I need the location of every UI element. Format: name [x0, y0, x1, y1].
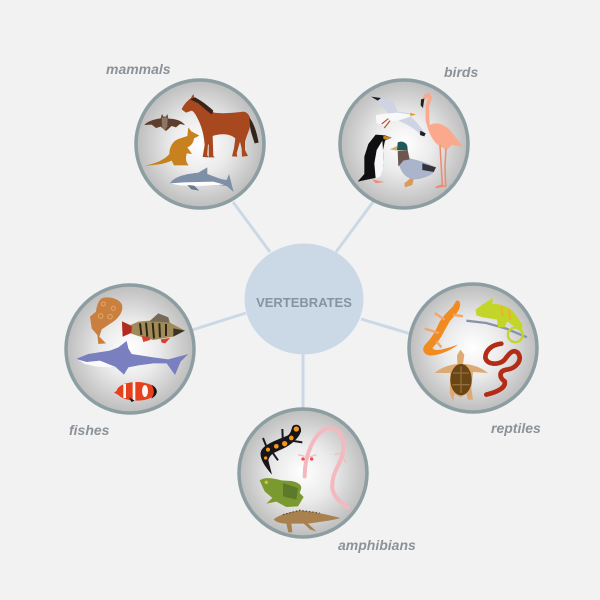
- icon: penguin: [358, 135, 392, 183]
- label: reptiles: reptiles: [491, 420, 541, 436]
- icon: turtle: [435, 350, 488, 401]
- icon: clownfish: [114, 382, 157, 402]
- label: fishes: fishes: [69, 422, 110, 438]
- icon: lizard: [423, 301, 463, 355]
- icon: snake: [485, 344, 520, 395]
- icon: seagull: [371, 97, 426, 136]
- icon: shark: [77, 341, 188, 375]
- icon: caecilian: [298, 428, 348, 508]
- central node: vertebrates: VERTEBRATES: [256, 295, 352, 310]
- panel: reptiles: [409, 284, 537, 412]
- icon: duck: [390, 142, 436, 187]
- icon: frog: [260, 478, 304, 507]
- central node: vertebrates: [244, 244, 364, 354]
- connector lines: [192, 202, 411, 410]
- icon: fire salamander: [261, 425, 302, 475]
- panel: mammals: [136, 80, 264, 208]
- icon: perch: [122, 313, 185, 343]
- icon: dolphin: [170, 167, 234, 192]
- panel: fishes: [66, 285, 194, 413]
- label: amphibians: amphibians: [338, 537, 416, 553]
- label: mammals: mammals: [106, 61, 171, 77]
- icon: kangaroo: [145, 127, 199, 166]
- icon: chameleon: [466, 298, 527, 342]
- icon: bat: [144, 114, 185, 131]
- label: birds: birds: [444, 64, 478, 80]
- icon: newt: [274, 510, 340, 532]
- icon: horse: [182, 94, 259, 157]
- panel: birds: [340, 80, 468, 208]
- icon: flatfish: [90, 297, 122, 344]
- icon: flamingo: [421, 93, 463, 187]
- panel: amphibians: [239, 409, 367, 537]
